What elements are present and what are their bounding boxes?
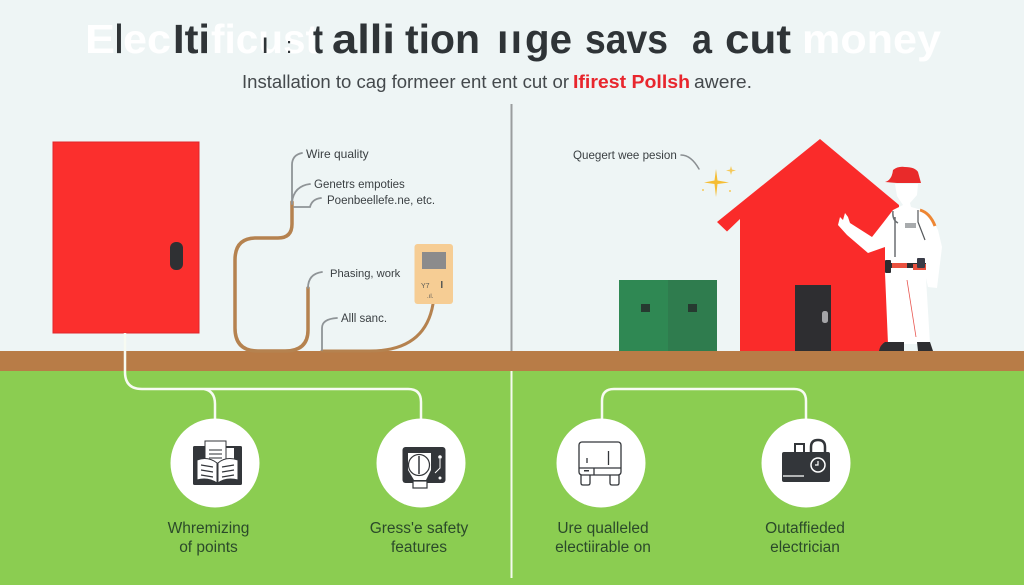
title: tion [405, 16, 480, 62]
title: a [692, 16, 713, 62]
icon: wall meter device: Y7 [421, 283, 430, 290]
caption: electrician: Outaffieded [765, 520, 845, 537]
title: ec [123, 16, 171, 62]
title: l [115, 16, 123, 62]
red house [717, 139, 899, 351]
callout: sparkle note: Quegert wee pesion [573, 149, 677, 162]
caption: safety features: features [391, 539, 447, 556]
wiring diagram [235, 153, 433, 351]
wire labels: Wire quality [306, 147, 369, 161]
green utility boxes [619, 280, 717, 351]
title: savs [585, 16, 668, 62]
icon: wall meter device [414, 244, 453, 304]
subtitle: awere. [694, 71, 752, 92]
icon: wall meter device: .ıl. [427, 294, 434, 300]
electrician figure [838, 167, 942, 351]
title: cut [725, 16, 791, 62]
panel: red electrical cabinet [53, 142, 199, 333]
caption: electrician: electrician [770, 539, 840, 556]
title: E [85, 16, 115, 62]
title: ficust [211, 16, 319, 62]
title: t [313, 16, 323, 62]
title: ıı [497, 16, 522, 62]
caption: points: of points [179, 539, 238, 556]
caption: safety features: Gress'e safety [370, 520, 468, 537]
wire labels: Genetrs empoties [314, 179, 405, 191]
icon circle: outline appliance [556, 418, 646, 508]
caption: points: Whremizing [168, 520, 249, 537]
title: : [286, 33, 292, 58]
wire labels: Poenbeellefe.ne, etc. [327, 195, 435, 207]
caption: qualified: electiirable on [555, 539, 651, 556]
title: ge [525, 16, 572, 62]
icon circle: safety breaker [376, 418, 466, 508]
white connector: left panel [125, 333, 421, 419]
callout: sparkle note [573, 149, 736, 197]
subtitle [242, 71, 752, 92]
subtitle: Installation to cag formeer ent ent cut or [242, 71, 569, 92]
title: money [802, 16, 941, 62]
white connector: right panel [602, 389, 806, 419]
title [85, 16, 941, 62]
icon circle: manual book [170, 418, 260, 508]
title: Iti [173, 16, 210, 62]
wire labels [306, 147, 435, 325]
title: alli [332, 16, 395, 62]
caption: qualified: Ure qualleled [557, 520, 649, 537]
title: ı [261, 27, 269, 60]
icon circle: electrician tool case [762, 418, 850, 508]
wire labels: Alll sanc. [341, 313, 387, 325]
subtitle: Ifirest Pollsh [573, 71, 690, 92]
wire labels: Phasing, work [330, 268, 401, 280]
